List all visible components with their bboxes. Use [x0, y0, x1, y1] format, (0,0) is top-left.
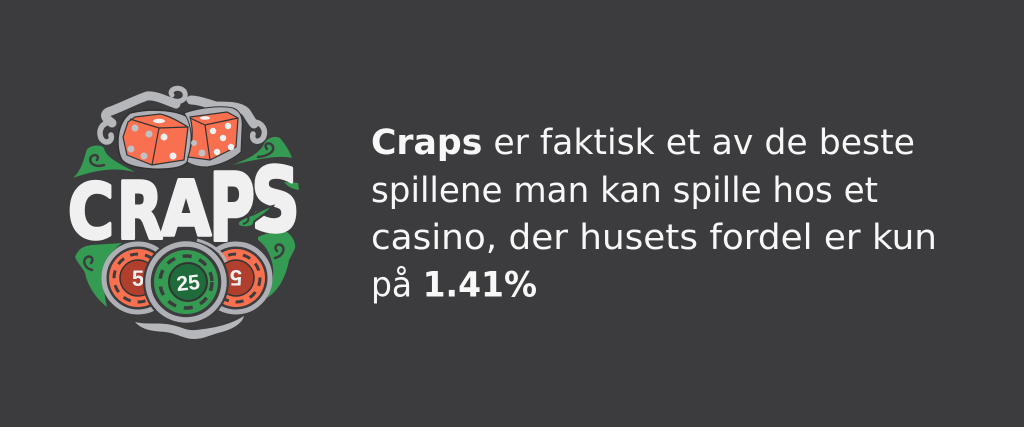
text line 4: på 1.41% — [371, 266, 537, 306]
text line 1: Craps er faktisk et av de beste — [371, 123, 915, 163]
logo word CRAPS — [68, 149, 300, 263]
icon: grey ribbon base — [135, 316, 244, 339]
craps logo — [68, 88, 300, 339]
logo word CRAPS: R — [117, 167, 163, 257]
icon: green chip centre: 25 — [175, 271, 201, 296]
logo word CRAPS: C — [68, 167, 114, 256]
icon: red chip left — [104, 244, 172, 312]
icon: green chip centre — [143, 239, 229, 325]
logo word CRAPS: P — [209, 154, 255, 263]
icon: red die right — [184, 107, 242, 167]
text line 2: spillene man kan spille hos et — [371, 171, 878, 211]
icon: red die left — [118, 110, 192, 169]
text block: craps description — [371, 123, 937, 306]
text line 3: casino, der husets fordel er kun — [371, 218, 937, 258]
icon: flourish spirals — [84, 143, 283, 270]
logo word CRAPS: S — [251, 149, 300, 252]
icon: red chip right: 5 — [230, 265, 242, 290]
icon: grey ornament scrolls — [100, 88, 264, 142]
icon: red chip right — [202, 244, 270, 312]
icon: small green flourish under S — [238, 206, 273, 227]
icon: green flourishes — [73, 137, 299, 307]
logo word CRAPS: A — [161, 164, 211, 253]
icon: red chip left: 5 — [132, 266, 144, 291]
